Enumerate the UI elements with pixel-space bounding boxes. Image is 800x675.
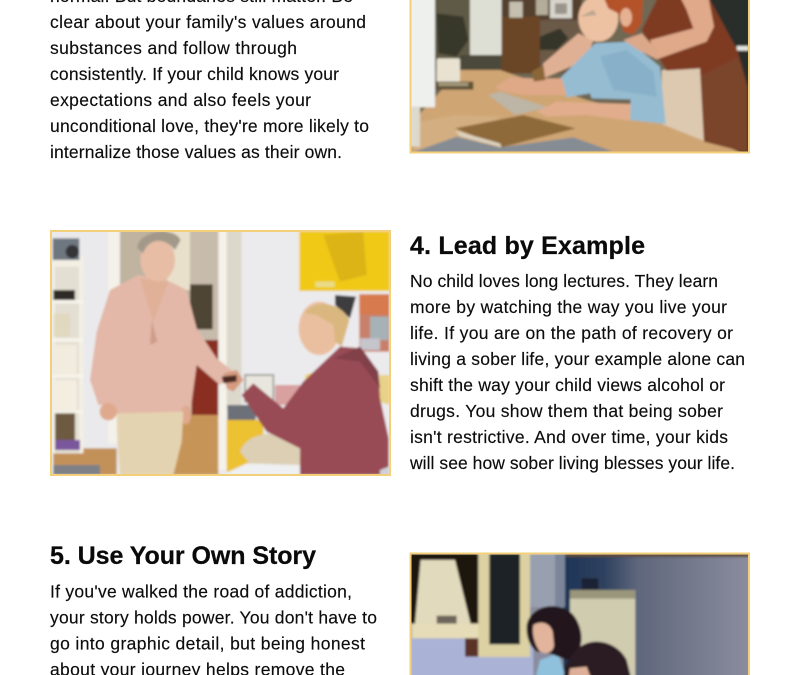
photo frame — [410, 0, 749, 152]
text block: boundaries paragraph: substances and follow through — [50, 38, 297, 58]
text block: lead by example paragraph: more by watching the way you live your — [410, 297, 727, 317]
text block: use your own story paragraph: go into graphic detail, but being honest — [50, 634, 365, 654]
heading: 5. Use Your Own Story: 5. Use Your Own Story — [50, 542, 316, 570]
photo: mother and daughter in bedroom — [50, 230, 392, 477]
text block: lead by example paragraph: shift the way your child views alcohol or — [410, 375, 725, 395]
photo: woman and boy at computer — [410, 0, 750, 157]
photo frame — [410, 554, 749, 675]
text block: lead by example paragraph: living a sober life, your example alone can — [410, 349, 745, 369]
photo frame — [51, 231, 390, 475]
text block: lead by example paragraph — [409, 271, 745, 473]
text block: lead by example paragraph: will see how sober living blesses your life. — [409, 453, 735, 473]
text block: use your own story paragraph — [50, 582, 377, 675]
photo: mother and child in kitchen — [410, 554, 750, 675]
text block: boundaries paragraph — [50, 0, 369, 162]
text block: lead by example paragraph: life. If you are on the path of recovery or — [410, 323, 733, 343]
text block: lead by example paragraph: drugs. You show them that being sober — [410, 401, 723, 421]
text block: use your own story paragraph: If you've walked the road of addiction, — [50, 582, 352, 602]
text block: boundaries paragraph: internalize those values as their own. — [50, 142, 342, 162]
text block: boundaries paragraph: unconditional love, they're more likely to — [50, 116, 369, 136]
text block: lead by example paragraph: isn't restrictive. And over time, your kids — [410, 427, 728, 447]
text block: boundaries paragraph: expectations and also feels your — [50, 90, 311, 110]
text block: boundaries paragraph: clear about your family's values around — [50, 12, 366, 32]
text block: boundaries paragraph: consistently. If your child knows your — [50, 64, 339, 84]
text block: use your own story paragraph: your story holds power. You don't have to — [50, 608, 377, 628]
heading: 4. Lead by Example: 4. Lead by Example — [410, 232, 645, 260]
text block: lead by example paragraph: No child loves long lectures. They learn — [410, 271, 718, 291]
